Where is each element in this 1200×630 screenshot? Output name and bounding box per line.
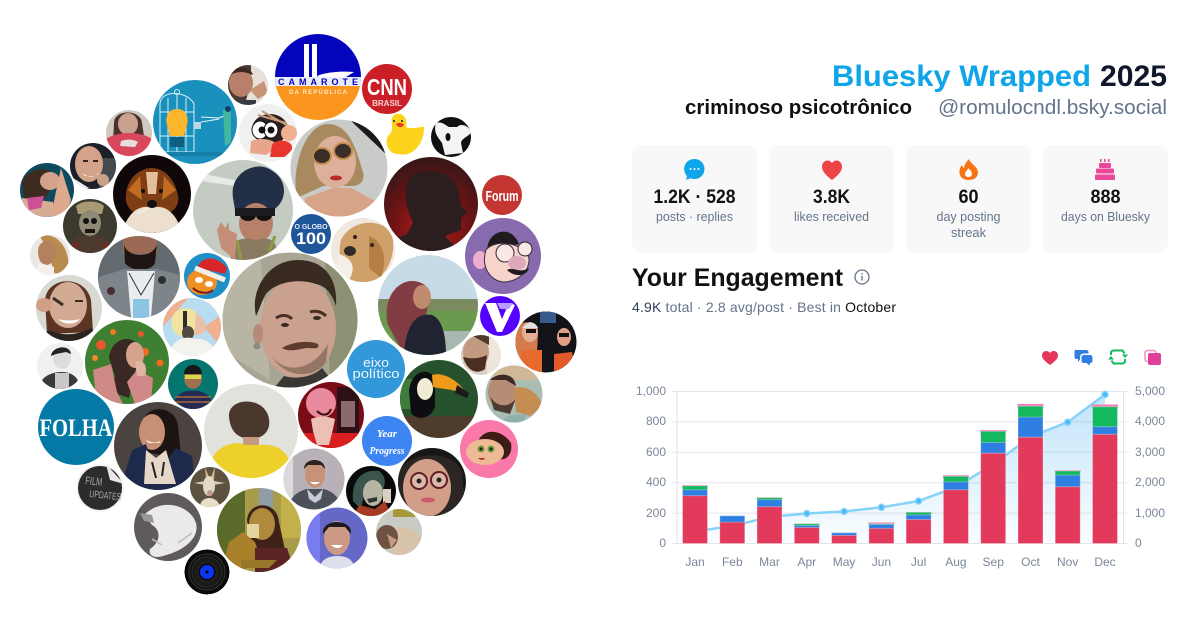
stacked bars: [682, 404, 1118, 544]
avatar: green-haired vampire: [346, 466, 396, 516]
avatar: O Globo 100 logo: O GLOBO: [294, 224, 328, 231]
right axis labels: 4,000: [1135, 414, 1165, 428]
month labels: Jul: [911, 555, 926, 569]
avatar: man at top: [228, 65, 268, 106]
engagement summary: 4.9K total · 2.8 avg/post · Best in October: [632, 299, 896, 315]
month labels: Aug: [945, 555, 967, 569]
chart legend icons: [1042, 350, 1161, 366]
right axis labels: 1,000: [1135, 506, 1165, 520]
avatar: Film Updates sticker: UPDATES: [89, 489, 122, 503]
month labels: Jun: [872, 555, 891, 569]
avatar: man and dog sleeping: [485, 365, 543, 423]
avatar: Forum logo: [482, 175, 522, 215]
panel: stat streak: [906, 145, 1031, 253]
avatar: girl in pink shirt: [106, 110, 152, 156]
panel: stat streak: streak: [951, 225, 986, 240]
icon: chat bubble: [684, 159, 704, 180]
left axis labels: [636, 384, 666, 550]
avatar: bearded man close-up: [461, 335, 501, 375]
panel: stat streak: day posting: [936, 209, 1000, 224]
avatar: Beyonce portrait: [30, 235, 70, 277]
avatar: Year Progress logo: Year: [377, 428, 398, 440]
month labels: Oct: [1021, 555, 1040, 569]
panel: avatar bubble cluster: [20, 34, 577, 594]
avatar: woman with towel turban: [193, 160, 293, 260]
avatar: woman in pink top: [20, 163, 74, 217]
avatar: woman with yellow sweater from behind: [204, 384, 298, 478]
avatar: two women in sunglasses: [515, 311, 577, 373]
month labels: Apr: [797, 555, 816, 569]
panel: stat posts: 1.2K · 528: [654, 187, 736, 208]
panel: stat likes: likes received: [794, 209, 869, 224]
title: 2025: [1100, 60, 1167, 93]
icon: info: [855, 270, 869, 284]
icon: flame: [959, 159, 978, 180]
avatar: CNN Brasil logo: BRASIL: [372, 99, 402, 108]
chart: monthly engagement stacked bars with cumulative line: [636, 384, 1165, 569]
avatar: Monica comic character: [239, 104, 297, 162]
cumulative line: [695, 394, 1105, 531]
avatar: smiling man in suit: [283, 448, 345, 510]
avatar: koala icon: [431, 117, 471, 157]
avatar: CNN Brasil logo: CNN: [367, 74, 407, 100]
avatar: collie dog with cigarette: [113, 155, 191, 233]
avatar: Film Updates sticker: FILM: [85, 475, 103, 489]
month labels: Jan: [685, 555, 705, 569]
panel: stat days on Bluesky: days on Bluesky: [1061, 209, 1150, 224]
avatar: Film Updates sticker: [76, 464, 124, 512]
avatar: Folha logo: [38, 389, 114, 465]
right axis labels: 3,000: [1135, 445, 1165, 459]
avatar: Camarote da Republica logo: [275, 34, 361, 120]
avatar: dark silhouette on red: [384, 157, 478, 251]
avatar: Camarote da Republica logo: DA REPÚBLICA: [289, 89, 348, 96]
month labels: Sep: [983, 555, 1004, 569]
avatar: skeleton nurse: [63, 199, 117, 253]
avatar: Year Progress logo: [362, 416, 412, 466]
month labels: Feb: [722, 555, 743, 569]
panel: stat posts: [632, 145, 757, 253]
right axis labels: 5,000: [1135, 384, 1165, 398]
avatar: Eixo Politico logo: político: [352, 366, 400, 381]
avatar: Eixo Politico logo: [347, 340, 405, 398]
avatar: golden retriever: [331, 218, 395, 282]
avatar: Camarote da Republica logo: CAMAROTE: [278, 77, 358, 87]
avatar: woman among flowers: [85, 320, 169, 404]
icon: birthday cake: [1095, 159, 1115, 180]
cumulative area: [695, 394, 1105, 544]
avatar: smiling man on purple: [306, 507, 368, 569]
icon: likes heart: [1042, 351, 1058, 365]
month labels: [685, 555, 1116, 569]
avatar: caged lightbulb illustration: [153, 80, 237, 164]
avatar: purple cartoon man with glasses: [465, 218, 541, 294]
avatar: santa hat cartoon: [184, 253, 230, 299]
heading: Your Engagement: Your Engagement: [632, 264, 844, 292]
user name and handle: [685, 97, 1167, 119]
avatar: goat: [190, 467, 230, 507]
avatar: woman in navy blazer: [114, 402, 202, 490]
avatar: sleeping tabby cat: [376, 509, 422, 555]
title: Bluesky Wrapped: [832, 60, 1091, 93]
user name and handle: @romulocndl.bsky.social: [938, 97, 1167, 119]
avatar: CNN Brasil logo: [362, 64, 412, 114]
panel: stat likes: 3.8K: [813, 187, 850, 208]
left axis labels: 200: [646, 506, 666, 520]
avatar: woman with curly hair by a lake: [378, 255, 478, 355]
avatar: man in sunglasses on teal: [168, 359, 218, 409]
icon: heart: [822, 160, 842, 180]
avatar: Folha logo: FOLHA: [40, 415, 112, 442]
left axis labels: 0: [659, 536, 666, 550]
avatar: smiling woman with face tattoo: [36, 275, 102, 341]
month labels: May: [833, 555, 855, 569]
month labels: Dec: [1094, 555, 1116, 569]
avatar: smiling bald man: [70, 143, 116, 189]
panel: stat posts: posts · replies: [656, 209, 733, 224]
avatar: woman with glasses: [398, 448, 466, 517]
right axis labels: [1135, 384, 1165, 550]
avatar: pink doll figure on red: [298, 382, 364, 448]
line points: [804, 392, 1108, 516]
panel: stat days on Bluesky: [1043, 145, 1168, 253]
icon: replies bubbles: [1074, 350, 1092, 366]
avatar: purple V logo: [480, 296, 520, 336]
month labels: Mar: [759, 555, 780, 569]
avatar: profile portrait, curly-haired man with mustache: [222, 252, 358, 388]
avatar: toucan: [400, 360, 478, 438]
right axis labels: 0: [1135, 536, 1142, 550]
icon: quotes copy squares: [1145, 350, 1161, 365]
avatar: sleeping white cat: [134, 493, 202, 561]
left axis labels: 600: [646, 445, 666, 459]
avatar: Eixo Politico logo: eixo: [363, 355, 389, 370]
left axis labels: 1,000: [636, 384, 666, 398]
panel: stat days on Bluesky: 888: [1090, 187, 1120, 208]
avatar: woman with headphones: [163, 298, 221, 356]
left axis labels: 400: [646, 475, 666, 489]
avatar: woman drinking: [217, 488, 301, 572]
icon: reposts arrows: [1108, 350, 1128, 364]
avatar: yellow rubber duck: [387, 114, 424, 155]
avatar: O Globo 100 logo: [291, 214, 331, 254]
user name and handle: criminoso psicotrônico: [685, 97, 912, 119]
avatar: pink cartoon kid: [460, 420, 518, 478]
avatar: Forum logo: Forum: [486, 188, 518, 205]
avatar: woman with orange sunglasses: [290, 119, 388, 217]
left axis labels: 800: [646, 414, 666, 428]
avatar: black and white portrait: [37, 343, 83, 389]
panel: stat likes: [769, 145, 894, 253]
avatar: vinyl record: [184, 550, 230, 594]
panel: stat streak: 60: [958, 187, 978, 208]
avatar: Year Progress logo: Progress: [370, 445, 404, 457]
month labels: Nov: [1057, 555, 1078, 569]
avatar: bearded man with denim jacket: [98, 236, 180, 318]
avatar: O Globo 100 logo: 100: [296, 229, 326, 248]
right axis labels: 2,000: [1135, 475, 1165, 489]
